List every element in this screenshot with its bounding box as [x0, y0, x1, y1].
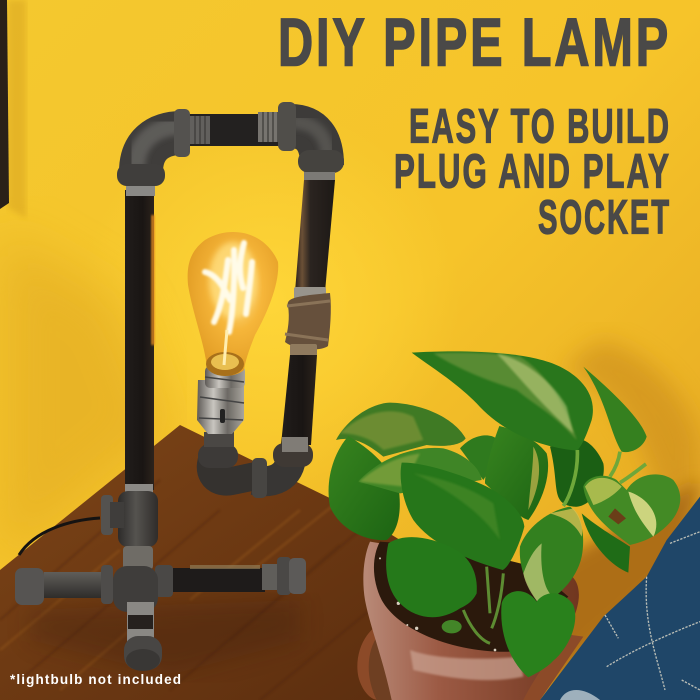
soil	[374, 542, 568, 652]
leaf: right of centre variegated	[520, 507, 583, 605]
top horizontal pipe	[190, 112, 283, 146]
base left arm	[15, 565, 113, 605]
leaf: heart variegated right	[583, 474, 680, 545]
base right arm	[155, 557, 306, 597]
base centre fitting	[113, 566, 158, 612]
top left elbow	[117, 109, 190, 186]
lamp	[15, 102, 344, 671]
stems	[563, 450, 646, 506]
leaf: top left variegated	[336, 403, 466, 457]
right upper pipe	[295, 180, 335, 292]
base front leg	[124, 602, 162, 671]
wooden table	[0, 425, 400, 700]
coupling	[285, 287, 331, 356]
power cord	[19, 518, 100, 555]
top right elbow	[278, 102, 344, 181]
saucer	[357, 628, 583, 700]
footnote: *lightbulb not included	[10, 672, 181, 687]
leaf: large top	[412, 351, 593, 451]
leaf: large centre	[401, 463, 524, 570]
terracotta pot	[363, 542, 579, 700]
lower elbow	[198, 432, 313, 498]
leaf hole	[608, 508, 626, 524]
leaf: far left	[329, 436, 400, 540]
picture frame on wall	[0, 0, 26, 218]
leaf: small upper right	[583, 367, 647, 452]
leaf: lower left	[386, 537, 477, 617]
leaf: middle left variegated	[358, 448, 482, 493]
leaf: bottom	[501, 591, 575, 677]
left vertical pipe	[125, 184, 155, 490]
blue plaid blanket	[540, 497, 700, 700]
right lower pipe	[281, 355, 317, 445]
back leaves	[460, 435, 630, 573]
base tee	[101, 484, 158, 570]
small stems in soil	[463, 567, 503, 643]
leaf: centre upright	[485, 426, 548, 520]
plant and pot	[329, 351, 680, 700]
filament	[209, 242, 257, 318]
light socket	[197, 366, 245, 434]
lightbulb	[188, 232, 278, 376]
